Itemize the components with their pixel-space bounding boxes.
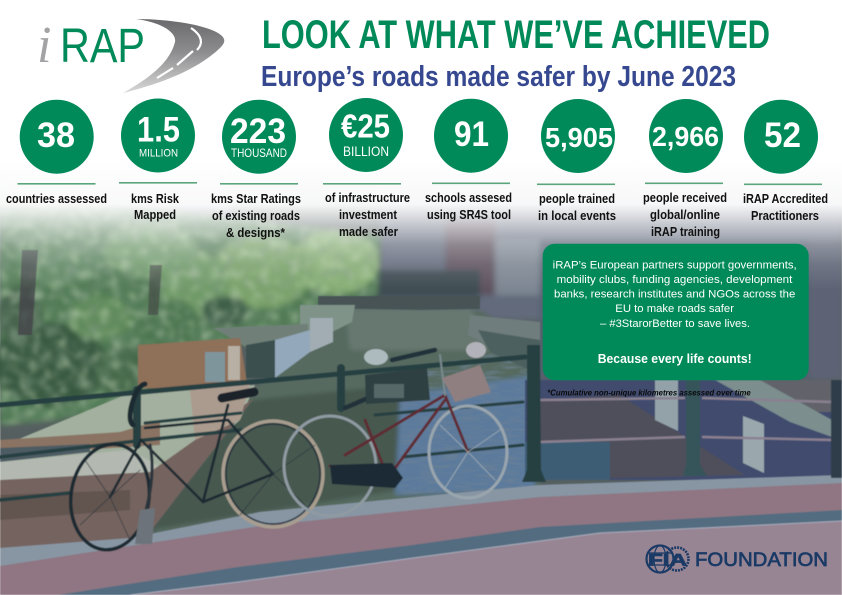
callout: partners statement: mobility clubs, funding agencies, development (557, 274, 792, 286)
background photo: canal with bicycles (0, 202, 842, 595)
wicker basket (442, 365, 491, 402)
callout: partners statement: EU to make roads safer (615, 303, 734, 315)
stat: 38 countries assessed: 38 (37, 116, 75, 155)
stat: 25 euro billion (323, 98, 410, 239)
logo road swoosh (123, 19, 224, 93)
top white fade over photo (0, 140, 842, 290)
stat: 5,905 people trained: people trained (539, 191, 615, 206)
stat: 52 practitioners: Practitioners (751, 208, 819, 223)
footnote: *Cumulative non-unique kilometres assessed over time (547, 387, 751, 397)
stat: 1.5 million kms: kms Risk (131, 191, 180, 206)
stat: 38 countries assessed: countries assessed (6, 191, 107, 206)
tree trunks (18, 250, 38, 335)
iRAP logo (37, 17, 224, 93)
foliage dark texture (0, 238, 376, 420)
subtitle: Europe’s roads made safer by June 2023 (261, 61, 736, 93)
stat: 223 thousand: of existing roads (212, 208, 300, 223)
stat: 52 practitioners (743, 100, 828, 223)
stat: 91 schools: using SR4S tool (427, 207, 511, 222)
railing (0, 357, 525, 500)
stat: 2,966 people online: 2,966 (652, 121, 719, 152)
stat: 5,905 people trained: 5,905 (545, 122, 613, 153)
stat: 2,966 people online: iRAP training (651, 224, 720, 239)
logo letter i: i (37, 17, 51, 74)
stat: 1.5 million kms: MILLION (139, 148, 178, 160)
stat: 91 schools (425, 99, 512, 222)
distant buildings (0, 150, 842, 380)
wooden cabin of large boat (138, 338, 248, 390)
stat: 91 schools: 91 (454, 115, 489, 154)
globe emblem (646, 546, 688, 572)
stat: 5,905 people trained: in local events (538, 208, 616, 223)
callout: partners statement: iRAP’s European partners support governments, (553, 259, 797, 271)
Foundation wordmark: FOUNDATION (695, 550, 828, 571)
large boat on left (0, 385, 255, 492)
pavement (0, 482, 842, 595)
FIA letters: FIA (648, 550, 687, 570)
stat: 1.5 million kms: 1.5 (137, 110, 180, 150)
stat: 25 euro billion: BILLION (343, 144, 389, 159)
houseboats on the far side (300, 305, 355, 332)
callout: partners statement: banks, research institutes and NGOs across the (554, 289, 795, 301)
stat: 223 thousand: kms Star Ratings (211, 191, 301, 206)
stat: 223 thousand: THOUSAND (231, 146, 287, 160)
callout: partners statement (543, 244, 809, 380)
callout: partners statement: Because every life counts! (598, 351, 752, 366)
stat: 52 practitioners: 52 (764, 116, 801, 155)
stat: 52 practitioners: iRAP Accredited (743, 191, 828, 206)
tree canopy (0, 190, 380, 425)
stat: 2,966 people online: people received (643, 190, 727, 205)
bicycle: left black (64, 384, 323, 555)
stat: 223 thousand: 223 (230, 112, 286, 151)
stat: 25 euro billion: investment (339, 207, 398, 222)
stone bridge (318, 296, 480, 310)
stat: 25 euro billion: of infrastructure (325, 190, 410, 205)
bicycle: right red (284, 350, 507, 516)
right side dark water and building (525, 380, 842, 480)
black pannier (365, 368, 430, 404)
stat: 25 euro billion: €25 (341, 108, 390, 144)
FIA Foundation logo (646, 546, 828, 572)
stat: 5,905 people trained (537, 99, 616, 223)
bike lock block (135, 508, 155, 544)
stat: 1.5 million kms: Mapped (134, 207, 176, 222)
foliage light texture (0, 220, 378, 426)
stat: 25 euro billion: made safer (339, 224, 398, 239)
stat: 91 schools: schools assesed (425, 190, 512, 205)
stat: 223 thousand (211, 100, 301, 240)
canal water (150, 308, 540, 540)
logo letters RAP: RAP (60, 20, 145, 73)
stat: 1.5 million kms (119, 98, 197, 222)
flowers (364, 349, 388, 365)
stat: 223 thousand: & designs* (226, 225, 286, 240)
stat: 2,966 people online (643, 99, 727, 239)
chain guard (330, 463, 403, 488)
stat: 2,966 people online: global/online (650, 207, 720, 222)
stat: 38 countries assessed (6, 100, 107, 206)
callout: partners statement: – #3StarorBetter to save lives. (600, 318, 750, 330)
